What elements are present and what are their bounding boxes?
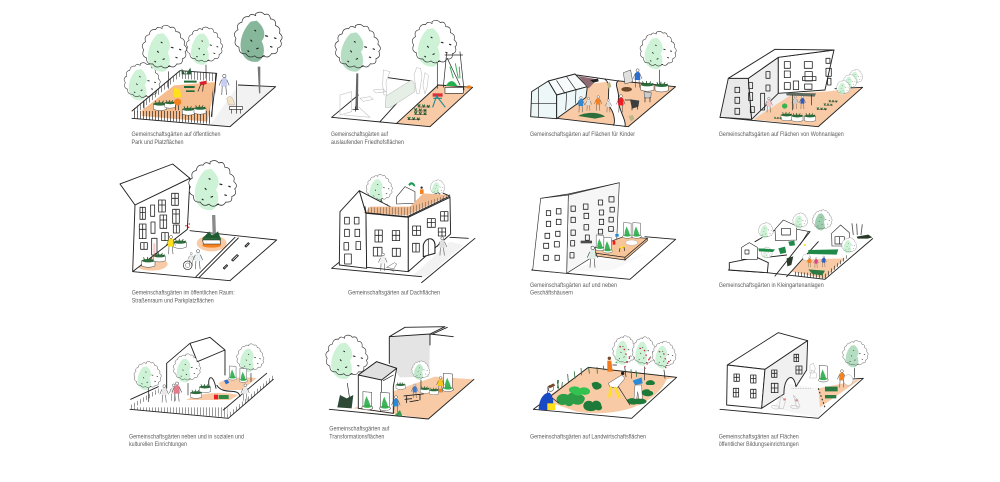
ghost people and bikes	[772, 363, 816, 409]
caption: Gemeinschaftsgärten auf und neben	[530, 282, 617, 289]
panel: Friedhofsflächen	[331, 20, 473, 146]
ghost figures	[383, 68, 428, 95]
gardener: yellow trousers	[608, 372, 630, 405]
caption: kulturellen Einrichtungen	[129, 441, 187, 448]
illustration: housing garden	[720, 49, 863, 127]
caption: Gemeinschaftsgärten neben und in sozialen und	[129, 434, 244, 441]
person: red gardener	[198, 81, 207, 91]
building	[720, 49, 834, 119]
caption: Gemeinschaftsgärten im öffentlichen Raum:	[132, 289, 235, 296]
panel: Bildungseinrichtungen	[719, 333, 868, 448]
caption: Gemeinschaftsgärten auf	[329, 426, 390, 433]
panel: Wohnanlagen	[719, 49, 863, 138]
people group	[160, 379, 249, 402]
fence	[793, 255, 847, 279]
illustration: social facilities	[130, 337, 273, 418]
caption: Transformationsflächen	[329, 434, 385, 441]
building	[533, 183, 619, 273]
caption: Gemeinschaftsgärten auf Dachflächen	[348, 290, 440, 296]
people and dog	[379, 237, 447, 271]
wheelchair and helper	[183, 250, 203, 270]
caption: auslaufenden Friedhofsflächen	[331, 139, 404, 146]
illustration: street garden	[120, 161, 277, 281]
panel: Landwirtschaftsflächen	[530, 336, 677, 441]
caption	[329, 426, 390, 441]
panel: Geschäftshäuser	[530, 183, 676, 297]
building	[339, 191, 451, 272]
bench: pale green	[385, 80, 415, 107]
illustration: roof garden	[332, 174, 475, 283]
small building	[358, 362, 397, 413]
panel: Park- und Platzflächen	[124, 12, 282, 146]
caption: Gemeinschaftsgärten auf Landwirtschaftsflächen	[530, 434, 646, 441]
gardener: blue kneeling	[539, 380, 559, 410]
illustration: transformation area	[326, 327, 474, 419]
illustration: park garden	[124, 12, 282, 127]
panel: Flächen für Kinder	[530, 31, 676, 138]
orchard trees	[613, 336, 676, 380]
building	[727, 333, 808, 408]
pergola with figures	[765, 93, 816, 112]
grave stones	[340, 89, 386, 117]
table and people	[392, 377, 444, 417]
people	[807, 256, 826, 268]
house outline	[167, 337, 225, 388]
caption	[530, 282, 617, 297]
caption: Gemeinschaftsgärten in Kleingartenanlagen	[719, 282, 824, 289]
caption: öffentlicher Bildungseinrichtungen	[719, 441, 799, 448]
garden people	[825, 370, 853, 398]
roof terrace	[581, 223, 647, 260]
caption	[719, 434, 799, 448]
caption: Park und Platzflächen	[132, 139, 184, 146]
building	[120, 164, 190, 272]
panel: Straßenraum	[120, 161, 277, 305]
person: yellow	[153, 235, 175, 257]
caption: Gemeinschaftsgärten auf	[331, 131, 388, 138]
beds	[408, 105, 430, 120]
seedlings	[557, 366, 637, 388]
shed roof brown	[578, 76, 599, 88]
person	[587, 246, 598, 267]
panel: Transformationsflächen	[326, 327, 474, 441]
left plots	[729, 213, 810, 273]
cabbage rows	[557, 380, 655, 411]
caption: Gemeinschaftsgärten auf Flächen von Wohnanlagen	[719, 131, 844, 138]
back building	[389, 327, 453, 377]
goats	[607, 82, 651, 122]
illustration: education	[720, 333, 868, 418]
caption: Gemeinschaftsgärten auf Flächen für Kinder	[530, 131, 635, 138]
roof elements	[366, 174, 445, 212]
illustration: allotments	[728, 210, 873, 279]
right plots	[803, 210, 872, 261]
greenhouse	[531, 74, 587, 119]
illustration: commercial building	[532, 183, 676, 279]
caption	[331, 131, 404, 146]
trellis	[443, 52, 472, 93]
illustration: farmland	[533, 336, 677, 418]
children and adults	[577, 69, 642, 119]
caption	[132, 289, 235, 305]
tree planter	[202, 231, 221, 248]
bench	[227, 81, 243, 113]
caption: Gemeinschaftsgärten auf Flächen	[719, 434, 799, 441]
illustration: children garden	[531, 31, 676, 127]
caption	[129, 434, 244, 448]
panel: soziale Einrichtungen	[129, 337, 273, 448]
gardener: blue shirt	[633, 377, 643, 399]
caption: Straßenraum und Parkplatzflächen	[132, 298, 214, 305]
beds	[774, 100, 838, 119]
person: walker	[219, 74, 229, 95]
caption: Geschäftshäusern	[530, 290, 573, 297]
illustration: cemetery garden	[332, 20, 473, 127]
panel: Dachflächen	[332, 174, 475, 296]
panel: Kleingartenanlagen	[719, 210, 873, 289]
person: yellow gardener	[174, 88, 181, 110]
caption	[132, 131, 221, 146]
person: gardener	[433, 93, 445, 107]
caption: Gemeinschaftsgärten auf öffentlichen	[132, 131, 221, 138]
figure: orange	[607, 357, 618, 372]
